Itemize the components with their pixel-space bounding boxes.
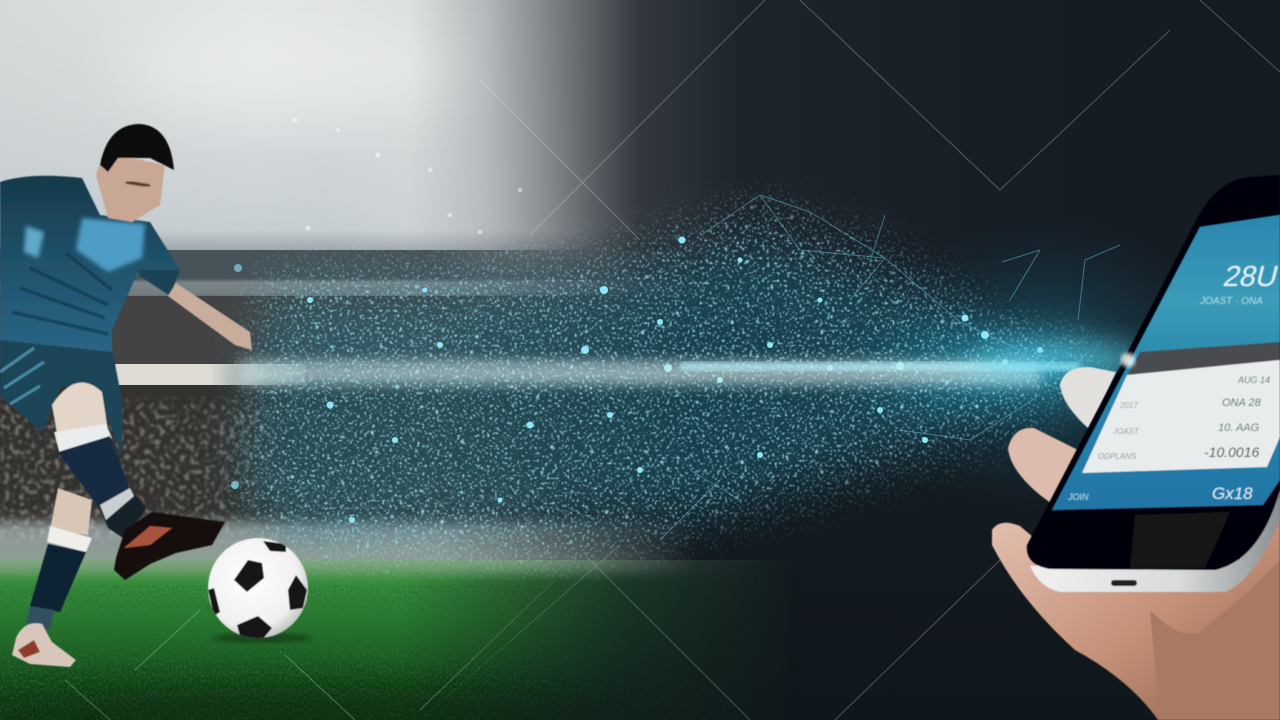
white stadium barrier xyxy=(115,364,305,385)
screen text: AUG 14 xyxy=(1237,375,1270,385)
soccer ball xyxy=(208,538,312,643)
screen text: JOAST · ONA xyxy=(1199,296,1263,307)
football player xyxy=(0,124,252,667)
smartphone xyxy=(1027,175,1280,592)
faint dots over the sky xyxy=(292,118,522,234)
diagonal grid lines xyxy=(420,0,1280,720)
phone metal edge xyxy=(1030,470,1280,592)
shirt xyxy=(0,176,180,352)
lens flare xyxy=(1121,353,1135,367)
screen text: Gx18 xyxy=(1212,484,1253,503)
standing leg xyxy=(12,488,92,667)
network lines xyxy=(660,195,1120,540)
shorts xyxy=(0,328,122,455)
background: sky fading to dark xyxy=(0,0,788,304)
phone screen xyxy=(1050,210,1280,512)
light beam across the middle xyxy=(240,346,1150,385)
hand holding phone xyxy=(992,367,1280,720)
pitch-edge mist xyxy=(0,548,680,572)
teal glow behind particles xyxy=(240,215,1240,540)
screen text: 2017 xyxy=(1119,401,1138,410)
screen text: 28U xyxy=(1220,260,1280,293)
phone black body xyxy=(1027,175,1280,570)
screen text: ODPLANS xyxy=(1098,452,1137,461)
stadium stands xyxy=(0,250,720,572)
screen text: ONA 28 xyxy=(1222,397,1262,409)
grass pitch xyxy=(0,560,800,720)
screen text: JOIN xyxy=(1067,492,1089,502)
boot xyxy=(114,512,225,580)
index finger xyxy=(1060,367,1116,430)
kicking leg xyxy=(52,383,146,540)
screen text xyxy=(1067,260,1280,503)
screen text: -10.0016 xyxy=(1204,444,1259,460)
screen text: JOAST xyxy=(1112,427,1140,436)
particle field xyxy=(200,118,1160,580)
bright nodes xyxy=(231,236,1043,523)
second finger xyxy=(1008,428,1078,507)
arm xyxy=(168,283,252,350)
head xyxy=(96,124,174,222)
crowd texture xyxy=(0,396,554,550)
screen text: 10. AAG xyxy=(1218,422,1260,434)
